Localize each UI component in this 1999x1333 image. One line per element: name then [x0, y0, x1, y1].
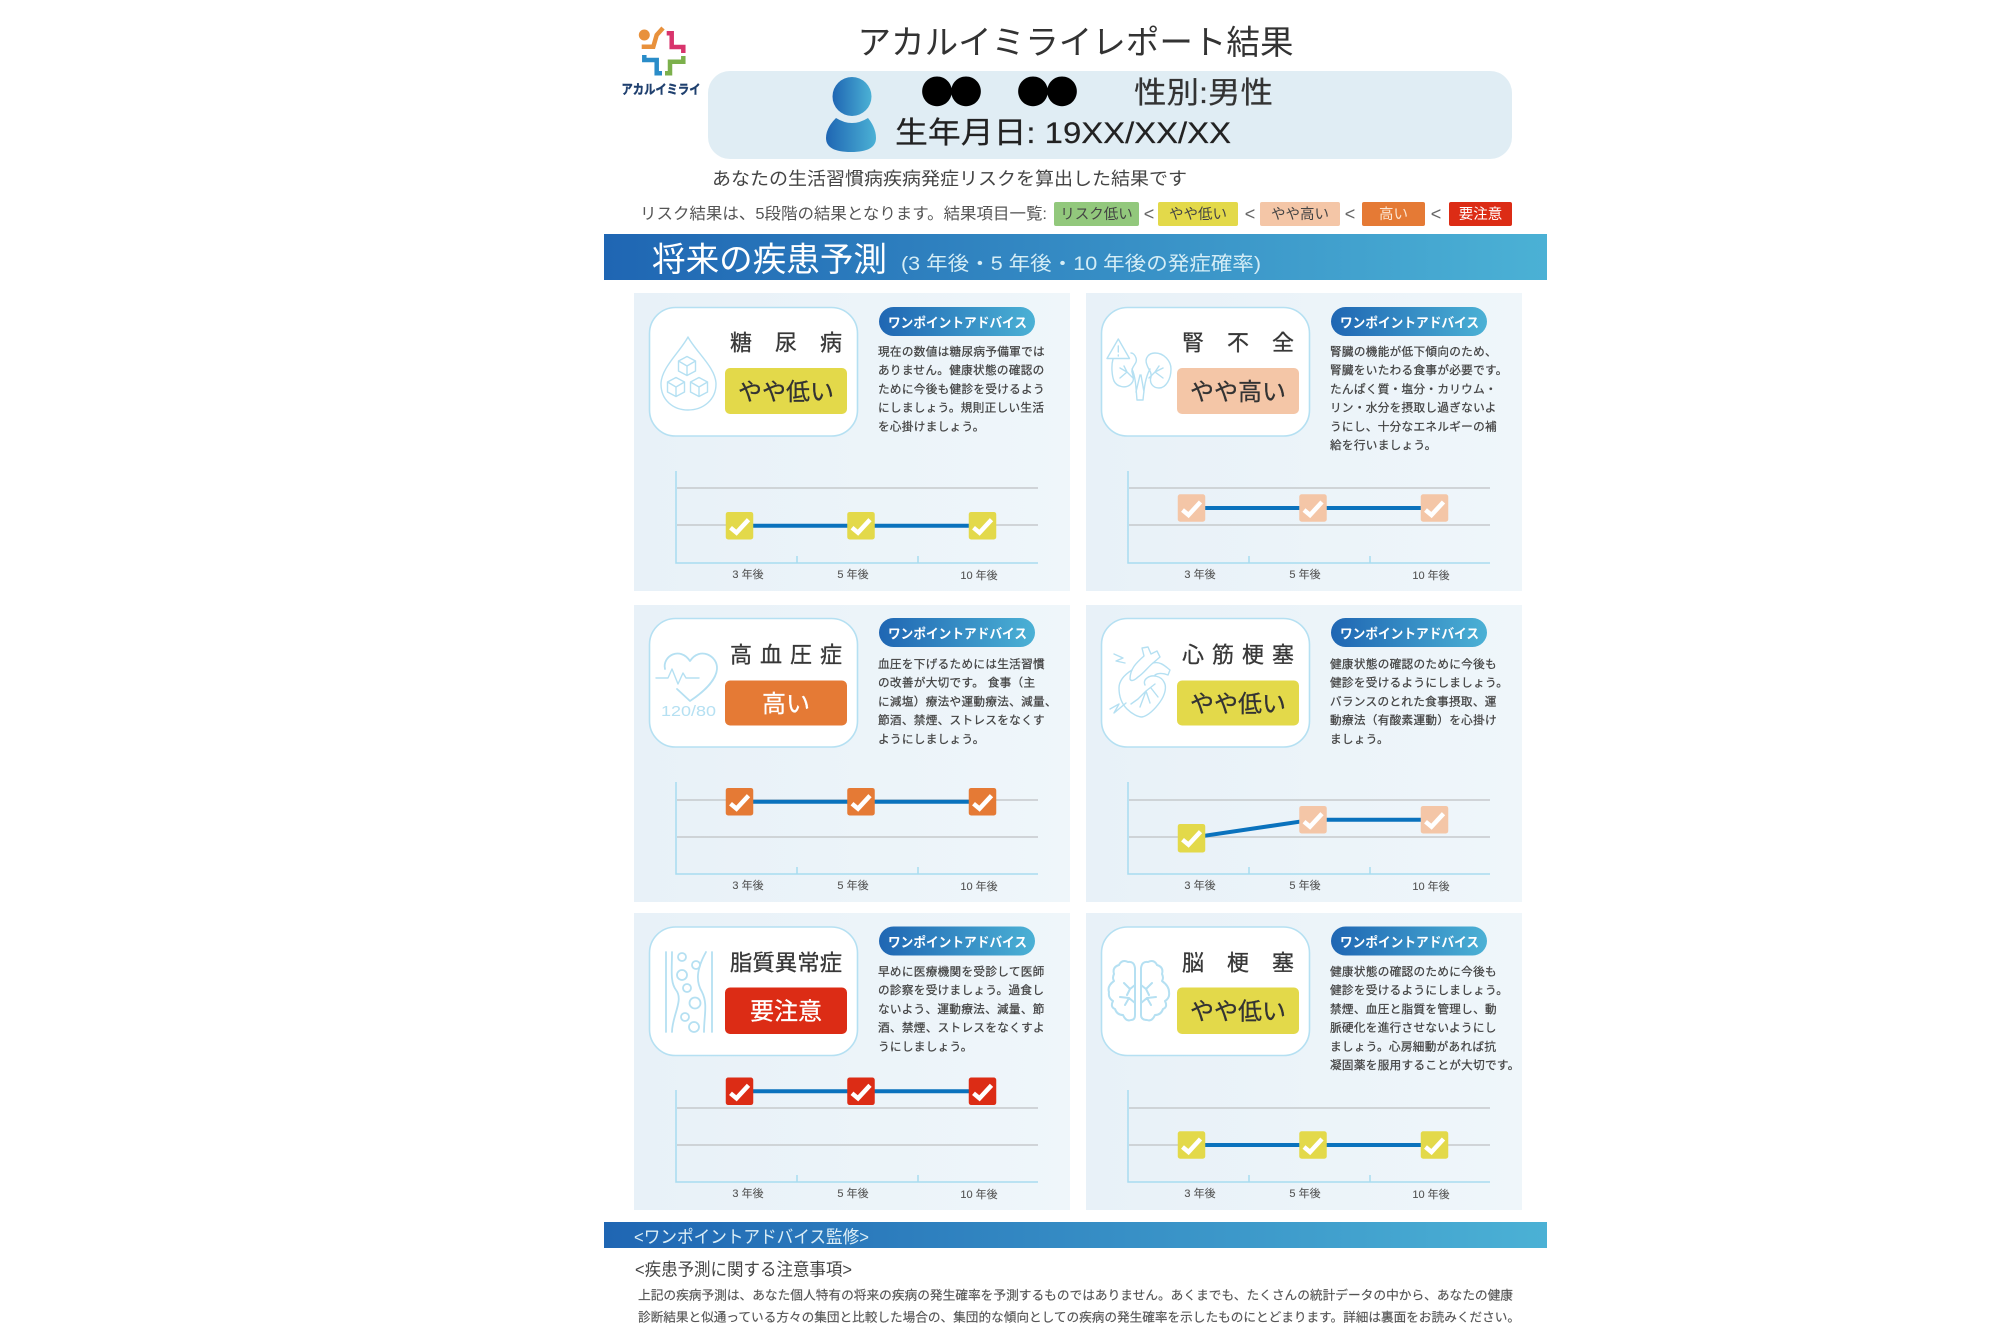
- footer bar: [604, 1222, 1547, 1248]
- advice text: 節酒、禁煙、ストレスをなくす: [878, 713, 1045, 727]
- icon: person: [826, 77, 876, 152]
- line chart: 10 年後: [1412, 568, 1450, 582]
- advice text: 脈硬化を進行させないようにし: [1330, 1021, 1497, 1035]
- line chart: 3 年後: [732, 878, 764, 892]
- advice text: 健診を受けるようにしましょう。: [1330, 983, 1508, 997]
- line chart: 3 年後: [1184, 1186, 1216, 1200]
- logo: [622, 28, 700, 97]
- icon: water drop with cubes: [661, 337, 716, 410]
- advice text: の改善が大切です。 食事（主: [878, 676, 1035, 690]
- line chart: 3 年後: [732, 567, 764, 581]
- line chart: 5 年後: [1289, 878, 1321, 892]
- line chart: [676, 782, 1038, 893]
- line chart: [676, 1078, 1038, 1201]
- icon: kidneys: [1107, 339, 1171, 400]
- subtitle: あなたの生活習慣病疾病発症リスクを算出した結果です: [712, 169, 1187, 189]
- advice text: にしましょう。規則正しい生活: [878, 401, 1044, 415]
- advice text: 健康状態の確認のために今後も: [1330, 657, 1497, 671]
- risk legend: 高い: [1379, 206, 1408, 223]
- line chart: 5 年後: [837, 567, 869, 581]
- section heading bar: 将来の疾患予測: [652, 242, 887, 279]
- advice text: 健診を受けるようにしましょう。: [1330, 676, 1508, 690]
- line chart: 3 年後: [732, 1186, 764, 1200]
- advice text: リン・水分を摂取し過ぎないよ: [1330, 401, 1497, 415]
- line chart: 10 年後: [960, 568, 998, 582]
- advice pill: [1331, 926, 1487, 956]
- risk legend: リスク結果は、5段階の結果となります。結果項目一覧:: [640, 205, 1047, 223]
- section heading bar: [604, 234, 1547, 280]
- footer bar: <ワンポイントアドバイス監修>: [634, 1227, 869, 1247]
- line chart: 3 年後: [1184, 567, 1216, 581]
- icon: heart with pulse: 120/80: [661, 703, 716, 720]
- advice pill: ワンポイントアドバイス: [1340, 626, 1479, 642]
- advice text: 血圧を下げるためには生活習慣: [878, 657, 1045, 671]
- advice pill: [1331, 618, 1487, 647]
- notes body: 診断結果と似通っている方々の集団と比較した場合の、集団的な傾向としての疾病の発生確率を示したものにとどまります。詳細は裏面をお読みください。: [638, 1310, 1520, 1324]
- advice text: 禁煙、血圧と脂質を管理し、動: [1330, 1002, 1497, 1016]
- advice text: [1330, 964, 1520, 1072]
- panel: user info: [708, 66, 1512, 159]
- panel: myocardial infarction: [1086, 605, 1522, 902]
- line chart: 5 年後: [1289, 567, 1321, 581]
- panel: diabetes: [634, 293, 1070, 591]
- advice text: ために今後も健診を受けるよう: [878, 382, 1045, 396]
- line chart: 5 年後: [837, 878, 869, 892]
- logo: アカルイミライ: [622, 82, 700, 97]
- advice text: に減塩）療法や運動療法、減量、: [878, 694, 1057, 708]
- advice pill: [879, 307, 1035, 336]
- advice pill: [879, 926, 1035, 956]
- advice text: の診察を受けましょう。過食し: [878, 983, 1044, 997]
- advice text: 腎臓をいたわる食事が必要です。: [1330, 363, 1508, 377]
- advice text: たんぱく質・塩分・カリウム・: [1330, 382, 1497, 396]
- line chart: [1128, 782, 1490, 893]
- advice text: 腎臓の機能が低下傾向のため、: [1330, 344, 1497, 358]
- advice text: [878, 657, 1057, 746]
- notes heading: <疾患予測に関する注意事項>: [635, 1260, 852, 1280]
- line chart: 10 年後: [1412, 1187, 1450, 1201]
- risk badge: [1177, 988, 1299, 1034]
- advice text: バランスのとれた食事摂取、運: [1330, 694, 1497, 708]
- line chart: 10 年後: [960, 879, 998, 893]
- line chart: [1128, 1090, 1490, 1201]
- title: アカルイミライレポート結果: [858, 25, 1294, 62]
- advice text: 酒、禁煙、ストレスをなくすよ: [878, 1022, 1045, 1035]
- icon: blood vessel with lipids: [666, 952, 712, 1032]
- advice text: [1330, 657, 1508, 746]
- risk legend: <: [1431, 204, 1441, 224]
- advice text: 現在の数値は糖尿病予備軍では: [878, 344, 1045, 358]
- advice text: ましょう。: [1330, 733, 1389, 746]
- panel: cerebral infarction: [1086, 913, 1522, 1210]
- advice pill: [1331, 307, 1487, 336]
- risk badge: [725, 680, 847, 726]
- advice text: [1330, 344, 1508, 452]
- masked name: ●●: [920, 66, 982, 114]
- advice pill: ワンポイントアドバイス: [1340, 935, 1479, 950]
- birth date: 生年月日: 19XX/XX/XX: [895, 117, 1231, 150]
- risk legend: <: [1245, 204, 1255, 224]
- advice text: 健康状態の確認のために今後も: [1330, 964, 1497, 978]
- disease name: 脂質異常症: [730, 950, 842, 976]
- advice pill: ワンポイントアドバイス: [1340, 316, 1479, 330]
- advice text: ましょう。心房細動があれば抗: [1330, 1039, 1496, 1053]
- advice pill: ワンポイントアドバイス: [888, 935, 1027, 950]
- disease name: 高血圧症: [730, 642, 842, 668]
- advice text: ないよう、運動療法、減量、節: [878, 1002, 1045, 1016]
- advice text: 給を行いましょう。: [1330, 439, 1437, 452]
- advice pill: ワンポイントアドバイス: [888, 316, 1027, 330]
- icon: heart with pulse: [656, 653, 717, 720]
- advice text: ありません。健康状態の確認の: [878, 363, 1045, 377]
- section heading bar: (3 年後・5 年後・10 年後の発症確率): [901, 253, 1261, 275]
- risk badge: やや低い: [1190, 998, 1286, 1026]
- disease name: 腎不全: [1182, 330, 1294, 356]
- risk legend: <: [1345, 204, 1355, 224]
- advice pill: [879, 618, 1035, 647]
- gender: 性別:男性: [1134, 77, 1273, 110]
- line chart: [1128, 471, 1490, 582]
- masked name 2: ●●: [1016, 66, 1078, 114]
- risk badge: やや低い: [738, 379, 834, 406]
- risk legend: <: [1144, 204, 1154, 224]
- panel: hypertension: [634, 605, 1070, 902]
- advice text: [878, 344, 1045, 433]
- advice text: 動療法（有酸素運動）を心掛け: [1330, 713, 1497, 727]
- advice text: うにしましょう。: [878, 1040, 973, 1053]
- advice text: うにし、十分なエネルギーの補: [1330, 419, 1497, 433]
- risk badge: やや低い: [1190, 691, 1286, 718]
- risk badge: [1177, 368, 1299, 414]
- risk badge: [725, 988, 847, 1034]
- advice text: ようにしましょう。: [878, 733, 985, 746]
- advice pill: ワンポイントアドバイス: [888, 626, 1027, 642]
- line chart: 5 年後: [837, 1186, 869, 1200]
- line chart: [676, 471, 1038, 582]
- disease name: 心筋梗塞: [1182, 642, 1294, 668]
- risk legend: リスク低い: [1060, 206, 1133, 223]
- line chart: 10 年後: [1412, 879, 1450, 893]
- icon: anatomical heart: [1110, 647, 1170, 717]
- notes body: 上記の疾病予測は、あなた個人特有の将来の疾病の発生確率を予測するものではありません。あくまでも、たくさんの統計データの中から、あなたの健康: [638, 1288, 1513, 1302]
- line chart: 3 年後: [1184, 878, 1216, 892]
- risk badge: [725, 368, 847, 414]
- risk badge: 要注意: [750, 998, 822, 1026]
- line chart: 5 年後: [1289, 1186, 1321, 1200]
- risk legend: 要注意: [1459, 206, 1502, 223]
- risk badge: [1177, 680, 1299, 726]
- advice text: [878, 964, 1045, 1053]
- icon: brain: [1109, 961, 1169, 1020]
- risk legend: やや低い: [1169, 206, 1227, 223]
- advice text: 早めに医療機関を受診して医師: [878, 964, 1045, 978]
- risk legend: [640, 202, 1512, 226]
- disease name: 脳梗塞: [1182, 950, 1294, 976]
- risk badge: 高い: [762, 691, 810, 718]
- line chart: 10 年後: [960, 1187, 998, 1201]
- advice text: を心掛けましょう。: [878, 419, 985, 433]
- risk badge: やや高い: [1190, 379, 1286, 406]
- notes body: [638, 1288, 1520, 1324]
- panel: dyslipidemia: [634, 913, 1070, 1210]
- disease name: 糖尿病: [730, 330, 842, 356]
- advice text: 凝固薬を服用することが大切です。: [1330, 1058, 1520, 1072]
- panel: kidney failure: [1086, 293, 1522, 591]
- risk legend: やや高い: [1271, 206, 1329, 223]
